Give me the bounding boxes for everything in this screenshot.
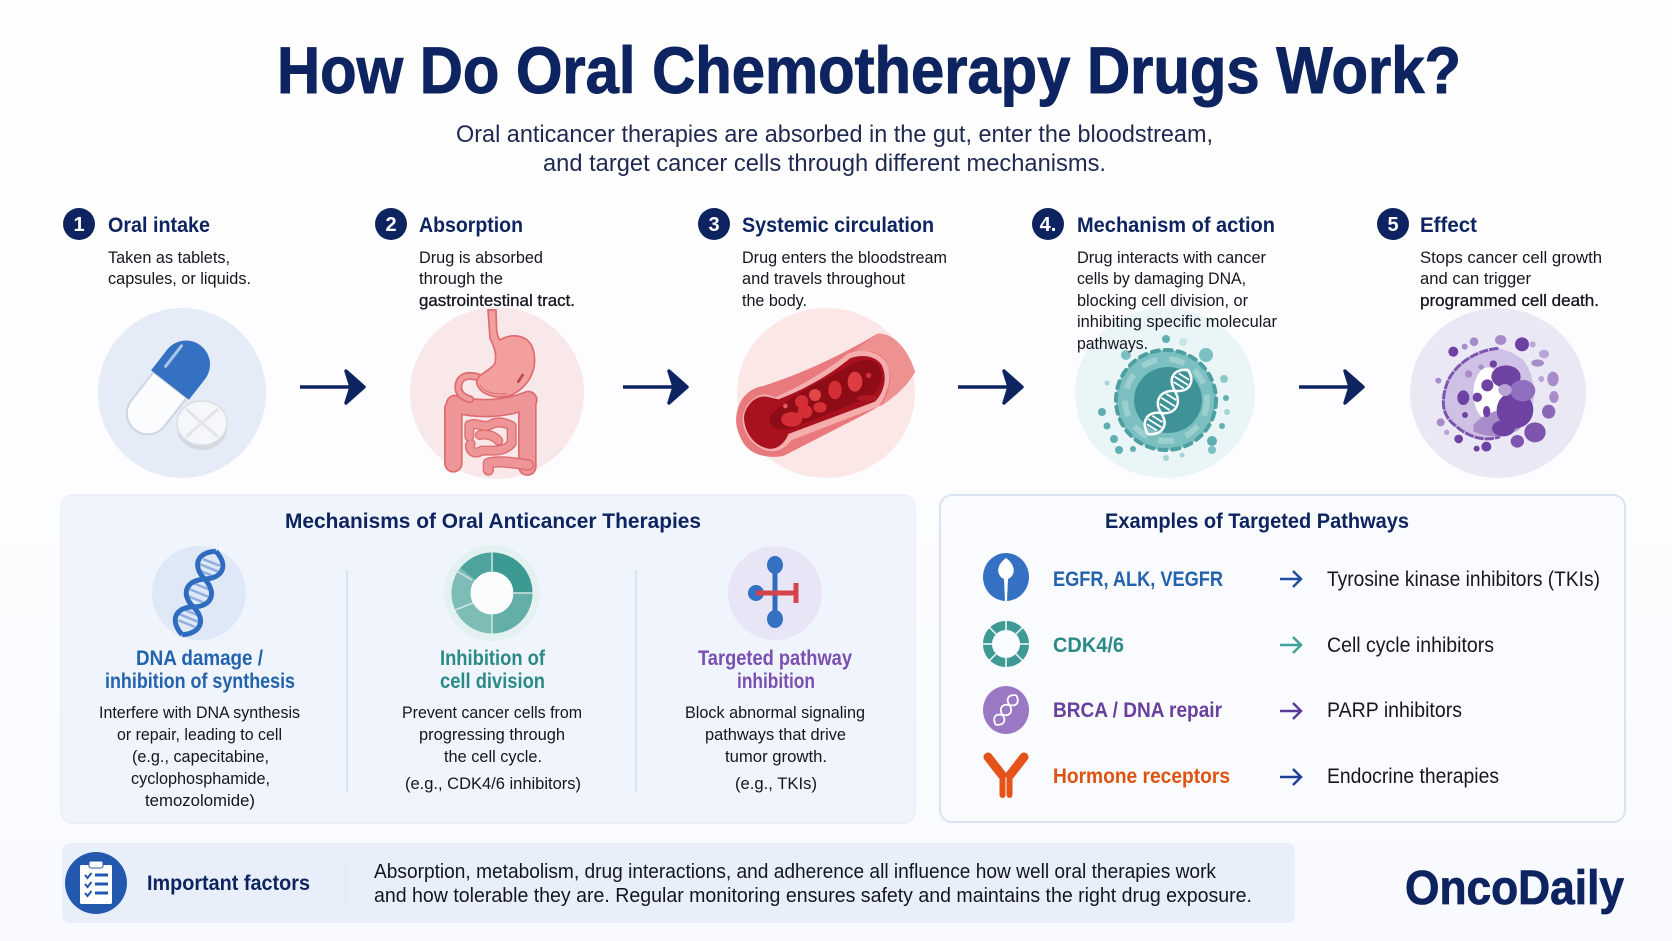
panel: important factors: and how tolerable they are. Regular monitoring ensures safety and maintains the right drug exposure. xyxy=(374,885,1252,907)
step 5: effect xyxy=(1377,208,1602,310)
step 1: oral intake: 1 xyxy=(73,214,85,236)
icon: digestive tract xyxy=(410,307,584,479)
row: EGFR xyxy=(983,553,1600,601)
step 3: systemic circulation: 3 xyxy=(708,214,720,236)
panel: examples of targeted pathways xyxy=(940,495,1625,822)
row: hormone receptors xyxy=(988,757,1499,795)
step 1: oral intake xyxy=(63,208,251,288)
logo: OncoDaily: OncoDaily xyxy=(1405,862,1624,915)
step 2: absorption: Drug is absorbed xyxy=(419,248,543,267)
step 4: mechanism of action: Mechanism of action xyxy=(1077,214,1275,237)
icon: clipboard xyxy=(65,852,127,914)
step 5: effect: and can trigger xyxy=(1420,269,1531,288)
row: EGFR: Tyrosine kinase inhibitors (TKIs) xyxy=(1327,568,1600,591)
panel heading: Examples of Targeted Pathways xyxy=(1105,510,1409,533)
column: targeted pathway: tumor growth. xyxy=(725,747,827,766)
title: How Do Oral Chemotherapy Drugs Work? xyxy=(277,33,1461,107)
row: CDK4/6 xyxy=(982,620,1494,668)
icon: cancer cell with DNA xyxy=(1075,308,1255,478)
step 3: systemic circulation: the body. xyxy=(742,291,807,310)
column: DNA damage: or repair, leading to cell xyxy=(117,725,282,744)
arrow 3 xyxy=(958,371,1022,403)
column: DNA damage: cyclophosphamide, xyxy=(131,769,270,788)
column: DNA damage: inhibition of synthesis xyxy=(105,670,295,693)
column: DNA damage: Interfere with DNA synthesis xyxy=(99,703,300,722)
step 4: mechanism of action: 4. xyxy=(1040,214,1056,236)
column: cell division: progressing through xyxy=(419,725,565,744)
step 2: absorption: through the xyxy=(419,269,503,288)
column: targeted pathway: Block abnormal signaling xyxy=(685,703,865,722)
panel: important factors: Important factors xyxy=(147,872,310,895)
step 4: mechanism of action: pathways. xyxy=(1077,334,1148,353)
row: BRCA: BRCA / DNA repair xyxy=(1053,699,1222,722)
step 4: mechanism of action: Drug interacts with cancer xyxy=(1077,248,1266,267)
column: DNA damage: DNA damage / xyxy=(136,647,263,670)
column: cell division xyxy=(402,545,582,793)
step 2: absorption: Absorption xyxy=(419,214,523,237)
row: hormone receptors: Endocrine therapies xyxy=(1327,765,1499,788)
column: cell division: cell division xyxy=(440,670,545,693)
row: BRCA xyxy=(983,686,1462,734)
step 3: systemic circulation xyxy=(698,208,947,310)
column: targeted pathway: inhibition xyxy=(737,670,815,693)
step 2: absorption: 2 xyxy=(385,214,397,236)
step 4: mechanism of action: blocking cell division, or xyxy=(1077,291,1248,310)
step 4: mechanism of action xyxy=(1032,208,1277,353)
icon: dying cell xyxy=(1410,308,1586,478)
subtitle xyxy=(456,121,1213,177)
column: targeted pathway xyxy=(685,546,865,793)
icon: blood vessel xyxy=(736,308,915,478)
step 1: oral intake: Taken as tablets, xyxy=(108,248,230,267)
step 2: absorption: gastrointestinal tract. xyxy=(419,291,575,310)
column: cell division: Inhibition of xyxy=(440,647,546,670)
arrow 2 xyxy=(623,371,687,403)
panel heading: Mechanisms of Oral Anticancer Therapies xyxy=(285,510,701,533)
subtitle: and target cancer cells through different mechanisms. xyxy=(543,150,1106,177)
column: targeted pathway: (e.g., TKIs) xyxy=(735,774,817,793)
column: DNA damage: (e.g., capecitabine, xyxy=(132,747,269,766)
step 3: systemic circulation: Drug enters the bloodstream xyxy=(742,248,947,267)
panel: important factors: Absorption, metabolism, drug interactions, and adherence all influence how well oral therapies work xyxy=(374,861,1217,883)
row: CDK4/6: Cell cycle inhibitors xyxy=(1327,634,1494,657)
row: hormone receptors: Hormone receptors xyxy=(1053,765,1230,788)
step 4: mechanism of action: inhibiting specific molecular xyxy=(1077,312,1277,331)
step 5: effect: 5 xyxy=(1387,214,1399,236)
step 5: effect: Stops cancer cell growth xyxy=(1420,248,1602,267)
column: targeted pathway: pathways that drive xyxy=(705,725,846,744)
step 1: oral intake: Oral intake xyxy=(108,214,210,237)
row: CDK4/6: CDK4/6 xyxy=(1053,634,1124,657)
arrow 4 xyxy=(1299,371,1363,403)
column: DNA damage: temozolomide) xyxy=(145,791,255,810)
subtitle: Oral anticancer therapies are absorbed in the gut, enter the bloodstream, xyxy=(456,121,1213,148)
column: targeted pathway: Targeted pathway xyxy=(698,647,852,670)
panel: mechanisms of oral anticancer therapies xyxy=(61,495,915,823)
step 3: systemic circulation: and travels throughout xyxy=(742,269,905,288)
column: cell division: the cell cycle. xyxy=(444,747,542,766)
column: cell division: (e.g., CDK4/6 inhibitors) xyxy=(405,774,581,793)
step 2: absorption xyxy=(375,208,575,310)
step 1: oral intake: capsules, or liquids. xyxy=(108,269,251,288)
step 3: systemic circulation: Systemic circulation xyxy=(742,214,934,237)
arrow 1 xyxy=(300,371,364,403)
column: cell division: Prevent cancer cells from xyxy=(402,703,582,722)
step 5: effect: Effect xyxy=(1420,214,1477,237)
column: DNA damage xyxy=(99,546,300,810)
panel: important factors xyxy=(62,843,1295,923)
step 5: effect: programmed cell death. xyxy=(1420,291,1599,310)
step 4: mechanism of action: cells by damaging DNA, xyxy=(1077,269,1246,288)
icon: capsule and tablet xyxy=(98,308,266,478)
row: BRCA: PARP inhibitors xyxy=(1327,699,1462,722)
row: EGFR: EGFR, ALK, VEGFR xyxy=(1053,568,1223,591)
